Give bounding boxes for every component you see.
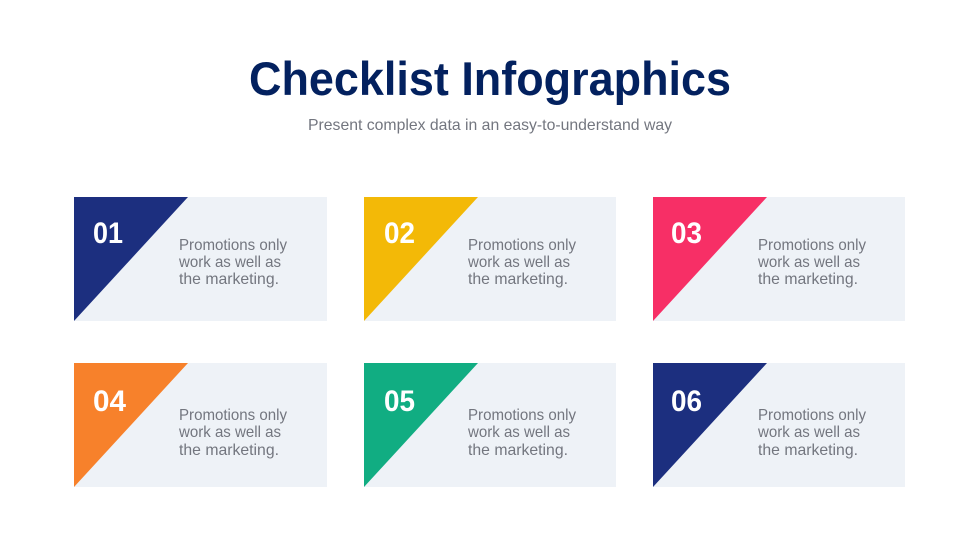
panel: item 03: Promotions only xyxy=(758,237,866,254)
panel: item 05: the marketing. xyxy=(468,442,568,459)
panel: item 01: Promotions only xyxy=(179,237,287,254)
panel: item 03 xyxy=(653,197,905,321)
panel: item 04: work as well as xyxy=(178,424,281,441)
panel: item 01 xyxy=(74,197,327,321)
panel: item 03: the marketing. xyxy=(758,271,858,288)
panel: item 03: 03 xyxy=(671,217,702,250)
panel: item 06: Promotions only xyxy=(758,407,866,424)
panel: item 02: the marketing. xyxy=(468,271,568,288)
panel: item 05: 05 xyxy=(384,385,415,418)
panel: item 04: 04 xyxy=(93,385,126,418)
subtitle: Present complex data in an easy-to-understand way xyxy=(308,117,672,134)
panel: item 04: Promotions only xyxy=(179,407,287,424)
panel: item 06: work as well as xyxy=(757,424,860,441)
panel: item 06: the marketing. xyxy=(758,442,858,459)
title: Checklist Infographics xyxy=(249,52,731,105)
panel: item 02: work as well as xyxy=(467,254,570,271)
panel: item 02: 02 xyxy=(384,217,415,250)
panel: item 02: Promotions only xyxy=(468,237,576,254)
panel: item 03: work as well as xyxy=(757,254,860,271)
panel: item 02 xyxy=(364,197,616,321)
panel: item 05 xyxy=(364,363,616,487)
panel: item 06: 06 xyxy=(671,385,702,418)
panel: item 06 xyxy=(653,363,905,487)
panel: item 04 xyxy=(74,363,327,487)
panel: item 01: 01 xyxy=(93,217,123,250)
panel: item 01: the marketing. xyxy=(179,271,279,288)
panel: item 04: the marketing. xyxy=(179,442,279,459)
panel: item 05: Promotions only xyxy=(468,407,576,424)
panel: item 05: work as well as xyxy=(467,424,570,441)
panel: item 01: work as well as xyxy=(178,254,281,271)
